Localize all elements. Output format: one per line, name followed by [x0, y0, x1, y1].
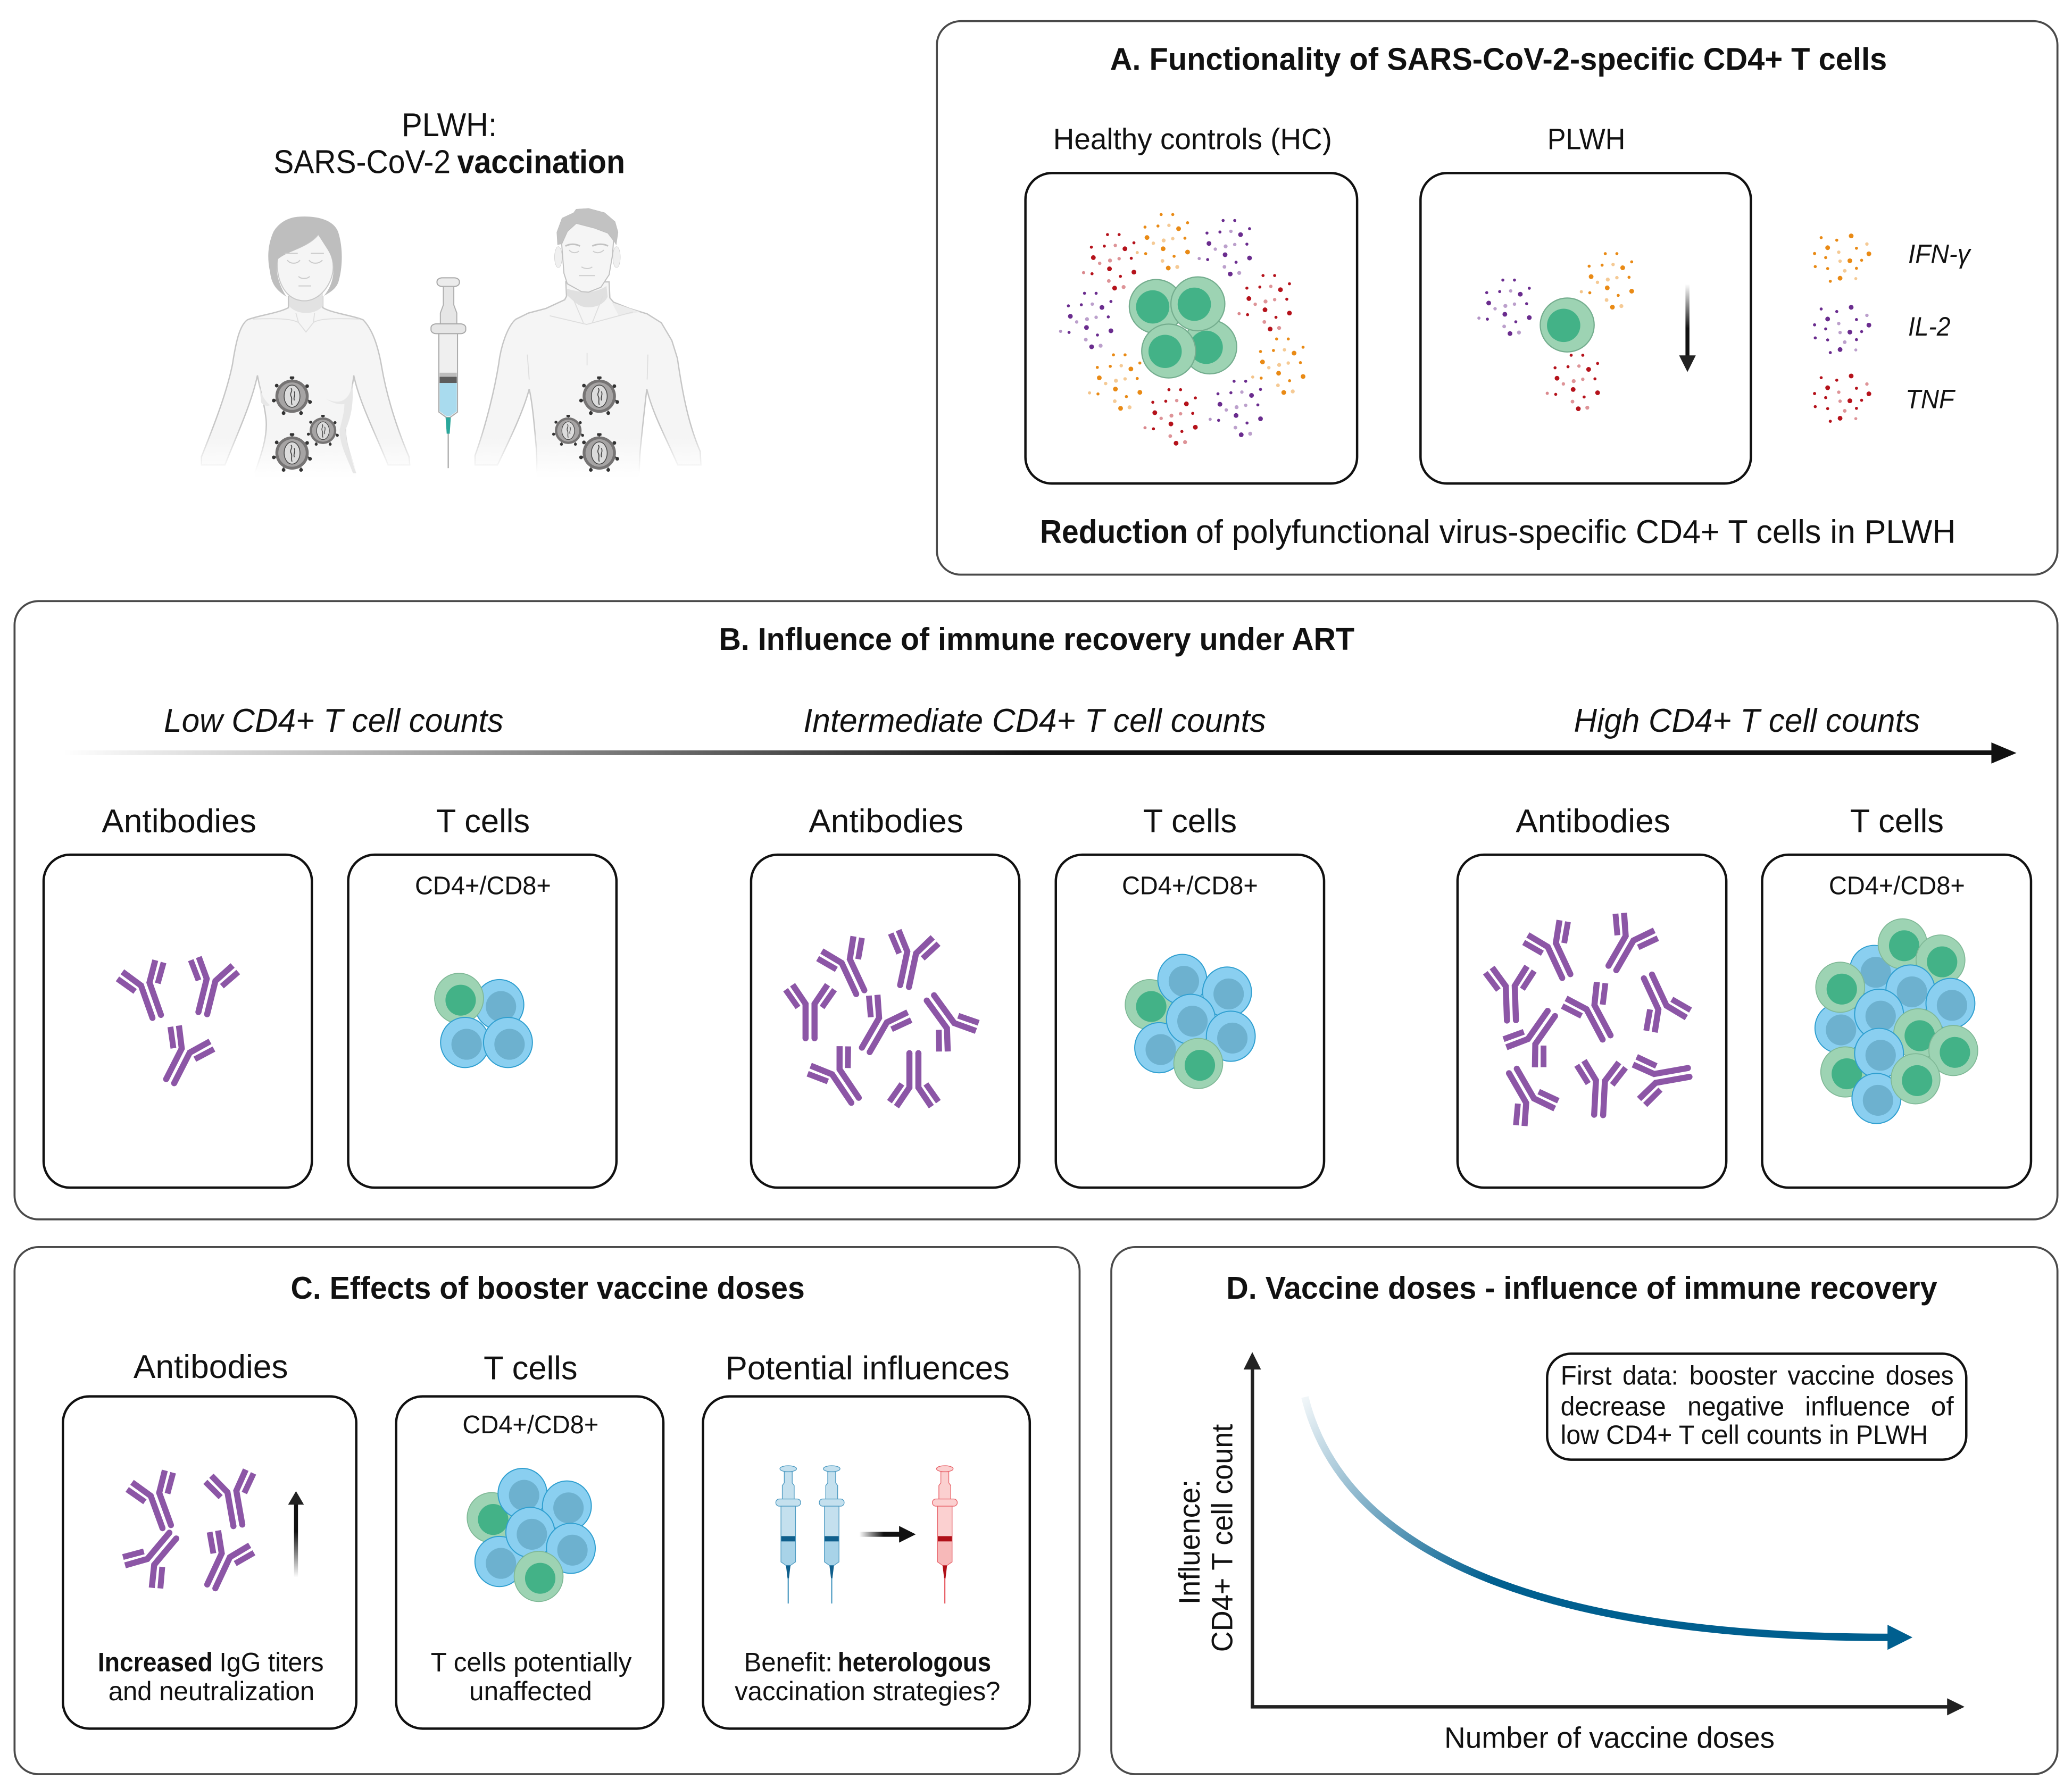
panel A: functionality of CD4+ T cells — [937, 21, 2058, 575]
callout: first data: vaccine — [1787, 1360, 1875, 1390]
callout: first data: doses — [1886, 1360, 1954, 1390]
label: low CD4 counts: Low CD4+ T cell counts — [164, 703, 503, 739]
icon: red syringe — [933, 1466, 957, 1603]
label: antibodies high: Antibodies — [1516, 803, 1670, 840]
box: T cells intermediate: CD4+/CD8+ — [1122, 872, 1258, 900]
box: T cells low: CD4+/CD8+ — [415, 872, 551, 900]
text: increased IgG: IgG titers — [219, 1647, 324, 1677]
legend: IL-2: IL-2 — [1908, 312, 1950, 341]
legend: IL-2 — [1813, 305, 1950, 354]
legend: TNF — [1813, 373, 1955, 423]
callout: first data: First — [1561, 1360, 1612, 1390]
text: increased IgG — [98, 1647, 324, 1706]
icon: blue syringes — [776, 1466, 844, 1603]
arrow: CD4 count gradient — [63, 742, 2017, 764]
icon: syringe — [431, 278, 466, 468]
legend: IFN-gamma — [1813, 233, 1972, 283]
text: panel A conclusion: of polyfunctional virus-specific CD4+ T cells in PLWH — [1196, 514, 1955, 550]
box: healthy controls cells and cytokines — [1026, 173, 1357, 483]
box: antibodies intermediate — [751, 855, 1019, 1188]
callout: first data: data: — [1622, 1360, 1678, 1390]
label: T cells intermediate: T cells — [1143, 803, 1237, 840]
text: heterologous benefit: vaccination strategies? — [735, 1676, 1000, 1706]
label: intermediate CD4 counts: Intermediate CD4+ T cell counts — [803, 703, 1266, 739]
label: antibodies: Antibodies — [134, 1349, 288, 1385]
callout: first data: influence — [1805, 1391, 1910, 1421]
label: antibodies low: Antibodies — [102, 803, 256, 840]
text: T cells unaffected: T cells potentially — [431, 1647, 632, 1677]
heading: panel C title: C. Effects of booster vaccine doses — [291, 1270, 805, 1306]
callout: first data: low CD4+ T cell counts in PLWH — [1561, 1420, 1928, 1450]
box: potential influences — [703, 1397, 1030, 1728]
panel: overview PLWH vaccination — [202, 107, 701, 480]
legend: TNF: TNF — [1905, 385, 1955, 414]
box: antibodies low — [44, 855, 312, 1188]
label: T cells high: T cells — [1850, 803, 1944, 840]
heading: panel D title: D. Vaccine doses - influence of immune recovery — [1226, 1270, 1937, 1306]
callout: first data: negative — [1687, 1391, 1784, 1421]
heading: SARS-CoV-2 vaccination: vaccination — [457, 144, 625, 180]
axis label: y: CD4+ T cell count — [1205, 1424, 1238, 1652]
heading: PLWH: PLWH: — [402, 107, 497, 144]
box: antibodies after booster — [63, 1397, 356, 1728]
label: T cells: T cells — [484, 1350, 578, 1386]
callout: first data: of — [1931, 1391, 1954, 1421]
text: heterologous benefit: heterologous — [838, 1647, 991, 1677]
arrow: decrease — [1679, 284, 1696, 372]
illustration: woman — [202, 216, 410, 479]
box: T cells high: CD4+/CD8+ — [1829, 872, 1965, 900]
text: T cells unaffected — [431, 1647, 632, 1706]
panel C: effects of booster vaccine doses — [14, 1247, 1079, 1774]
box: T cells after booster: CD4+/CD8+ — [462, 1410, 598, 1439]
heading: SARS-CoV-2 vaccination — [273, 144, 625, 180]
panel B: influence of immune recovery under ART — [14, 601, 2058, 1219]
text: T cells unaffected: unaffected — [469, 1676, 592, 1706]
illustration: man — [475, 208, 701, 480]
label: T cells low: T cells — [436, 803, 530, 840]
axis label: y — [1172, 1424, 1238, 1652]
label: PLWH: PLWH — [1547, 122, 1625, 156]
arrow: increase — [288, 1491, 304, 1577]
box: T cells low — [348, 855, 617, 1188]
panel D: vaccine doses and immune recovery — [1111, 1247, 2058, 1774]
heading: panel A title: A. Functionality of SARS-CoV-2-specific CD4+ T cells — [1110, 41, 1887, 77]
axis label: x: Number of vaccine doses — [1444, 1720, 1775, 1754]
label: antibodies intermediate: Antibodies — [809, 803, 963, 840]
callout: first data — [1547, 1353, 1966, 1460]
chart: axes — [1244, 1352, 1965, 1716]
icon: virus particles in woman — [272, 377, 339, 472]
label: potential influences: Potential influences — [726, 1350, 1010, 1386]
box: T cells high — [1762, 855, 2031, 1188]
callout: first data: booster — [1690, 1360, 1777, 1390]
label: high CD4 counts: High CD4+ T cell counts — [1574, 703, 1920, 739]
box: PLWH cells and cytokines — [1420, 173, 1751, 483]
text: increased IgG: and neutralization — [109, 1676, 314, 1706]
chart: decreasing curve arrow — [1305, 1397, 1912, 1650]
label: healthy controls: Healthy controls (HC) — [1053, 122, 1332, 156]
box: antibodies high — [1458, 855, 1726, 1188]
icon: virus particles in man — [552, 377, 619, 472]
callout: first data: decrease — [1561, 1391, 1666, 1421]
text: increased IgG: Increased — [98, 1647, 213, 1677]
text: heterologous benefit: Benefit: — [744, 1647, 833, 1677]
heading: panel B title: B. Influence of immune recovery under ART — [719, 621, 1354, 657]
heading: SARS-CoV-2 vaccination: SARS-CoV-2 — [273, 144, 451, 180]
axis label: y: Influence: — [1172, 1480, 1206, 1605]
text: panel A conclusion: Reduction — [1040, 514, 1188, 550]
box: T cells after booster — [396, 1397, 663, 1728]
arrow: to heterologous — [859, 1526, 916, 1543]
box: T cells intermediate — [1056, 855, 1324, 1188]
legend: IFN-gamma: IFN-γ — [1908, 239, 1972, 269]
text: heterologous benefit — [735, 1647, 1000, 1706]
